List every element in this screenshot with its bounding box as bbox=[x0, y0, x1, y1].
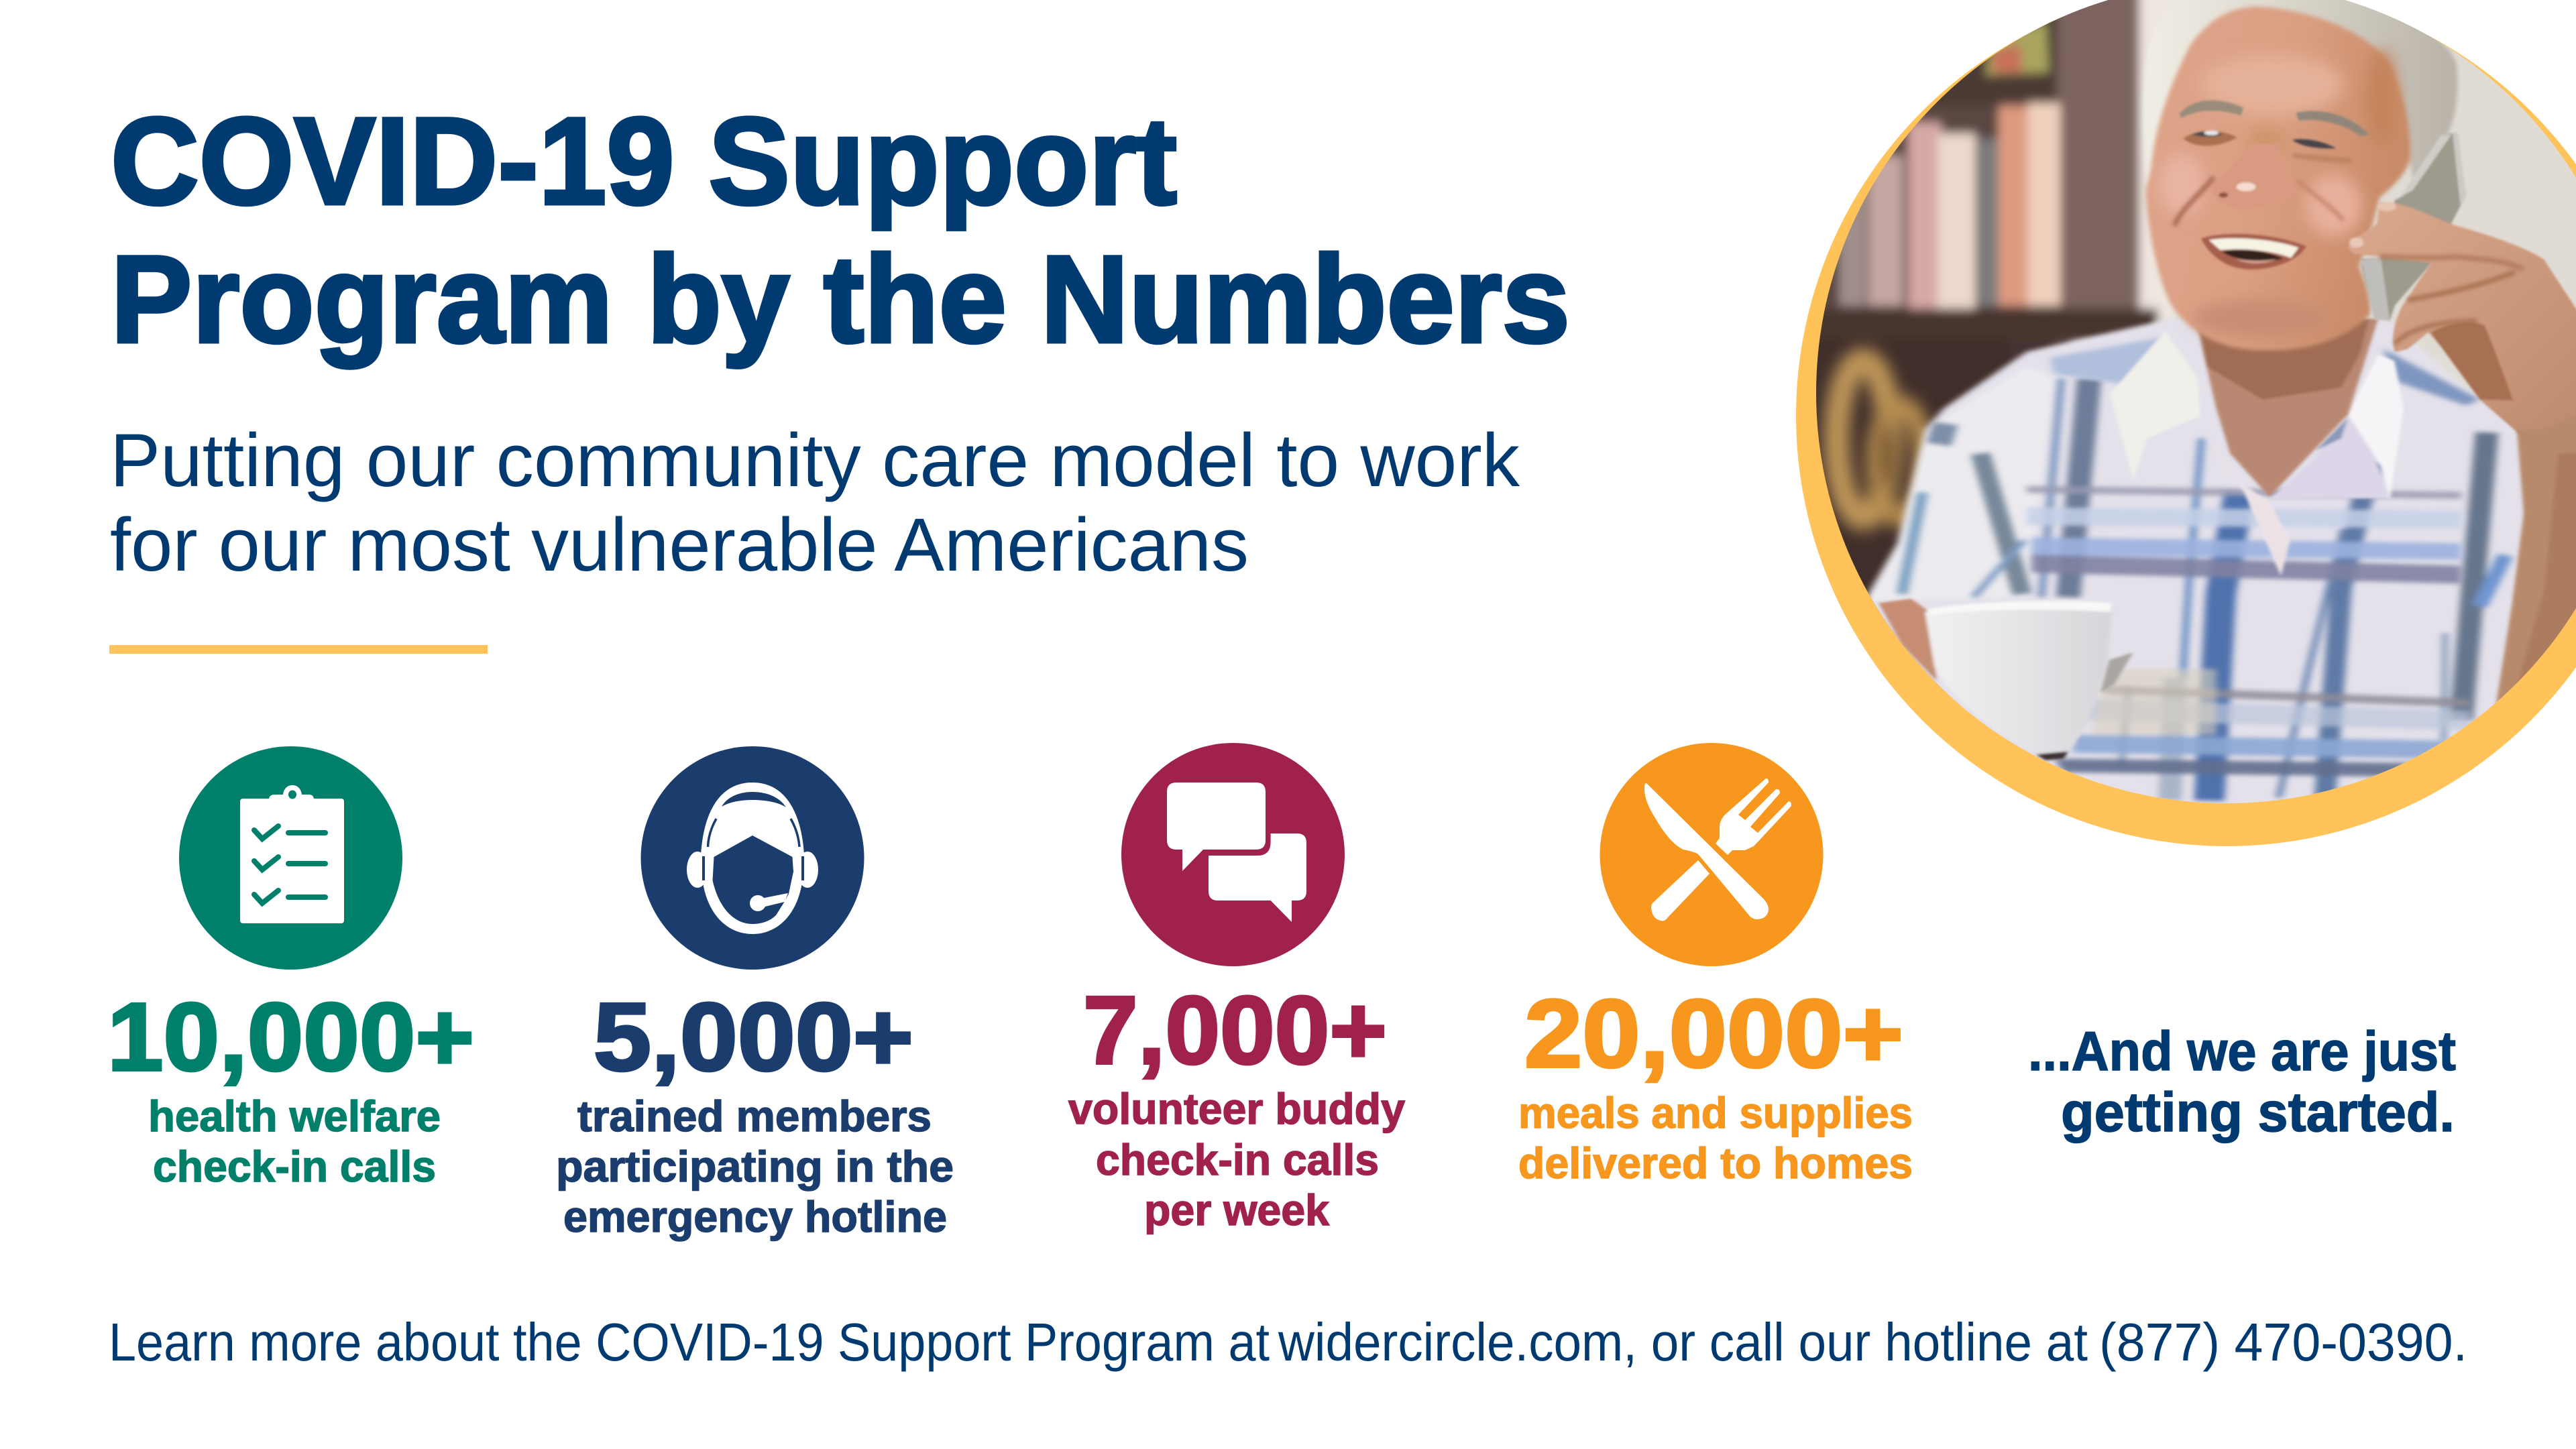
icon: clipboard bbox=[179, 746, 402, 970]
label bbox=[1068, 1084, 1405, 1234]
brows, eyes, nose, mouth bbox=[2180, 101, 2369, 270]
label: check-in calls bbox=[153, 1142, 436, 1191]
shirt plaid: horizontal stripes bbox=[2027, 337, 2480, 776]
neck bbox=[2196, 318, 2378, 497]
yellow circle behind photo bbox=[1796, 0, 2576, 846]
footer call to action: (877) 470-0390. bbox=[2099, 1312, 2467, 1372]
collar and placket bbox=[2110, 331, 2404, 576]
smile lines bbox=[2174, 156, 2351, 226]
shirt plaid: vertical stripes bbox=[1902, 379, 2506, 801]
subtitle: for our most vulnerable Americans bbox=[110, 503, 1249, 587]
decorative spiral ornament bbox=[1837, 361, 1924, 517]
subtitle bbox=[110, 418, 1520, 587]
title: Program by the Numbers bbox=[111, 231, 1570, 369]
closing statement bbox=[2028, 1020, 2456, 1143]
label bbox=[1518, 1088, 1913, 1187]
head and hand bbox=[2143, 0, 2576, 441]
footer call to action: Learn more about the COVID-19 Support Program at bbox=[109, 1312, 1270, 1372]
title bbox=[111, 93, 1570, 369]
label: trained members bbox=[577, 1092, 932, 1141]
stat: trained members bbox=[556, 746, 954, 1241]
phone bbox=[2361, 133, 2466, 321]
hand bbox=[2347, 202, 2576, 441]
label: per week bbox=[1144, 1185, 1330, 1234]
label: emergency hotline bbox=[563, 1192, 947, 1241]
closing statement: getting started. bbox=[2061, 1081, 2455, 1143]
icon: headset operator bbox=[641, 746, 864, 970]
hand creases bbox=[2379, 257, 2523, 344]
title: COVID-19 Support bbox=[111, 93, 1177, 231]
label: check-in calls bbox=[1096, 1135, 1379, 1184]
number: 5,000+: 5,000+ bbox=[594, 983, 913, 1091]
icon: knife and fork bbox=[1600, 743, 1823, 966]
label: participating in the bbox=[556, 1142, 954, 1191]
stat: meals and supplies bbox=[1518, 743, 1913, 1187]
stat: health welfare check-ins bbox=[107, 746, 474, 1191]
footer call to action bbox=[109, 1312, 2467, 1372]
label bbox=[556, 1092, 954, 1241]
background wall and shelf bbox=[1816, 0, 2576, 803]
label: health welfare bbox=[148, 1092, 441, 1141]
face shading bbox=[2159, 49, 2398, 336]
subtitle: Putting our community care model to work bbox=[110, 418, 1520, 502]
stat: volunteer buddy calls bbox=[1068, 743, 1405, 1234]
label: volunteer buddy bbox=[1068, 1084, 1405, 1133]
label bbox=[148, 1092, 441, 1191]
icon: speech bubbles bbox=[1121, 743, 1345, 966]
hair bbox=[2143, 0, 2457, 185]
number: 20,000+: 20,000+ bbox=[1524, 980, 1903, 1088]
shirt body bbox=[1866, 317, 2524, 803]
face bbox=[2146, 7, 2410, 351]
photo: smiling senior man on the phone bbox=[1744, 0, 2576, 867]
yellow divider rule bbox=[109, 645, 488, 654]
footer call to action: widercircle.com, or call our hotline at bbox=[1278, 1312, 2088, 1372]
forearm and coffee mug bbox=[1879, 408, 2576, 760]
label: delivered to homes bbox=[1518, 1139, 1913, 1187]
number: 7,000+: 7,000+ bbox=[1083, 976, 1387, 1084]
label: meals and supplies bbox=[1518, 1088, 1913, 1137]
closing statement: ...And we are just bbox=[2028, 1020, 2456, 1082]
number: 10,000+: 10,000+ bbox=[107, 983, 474, 1091]
